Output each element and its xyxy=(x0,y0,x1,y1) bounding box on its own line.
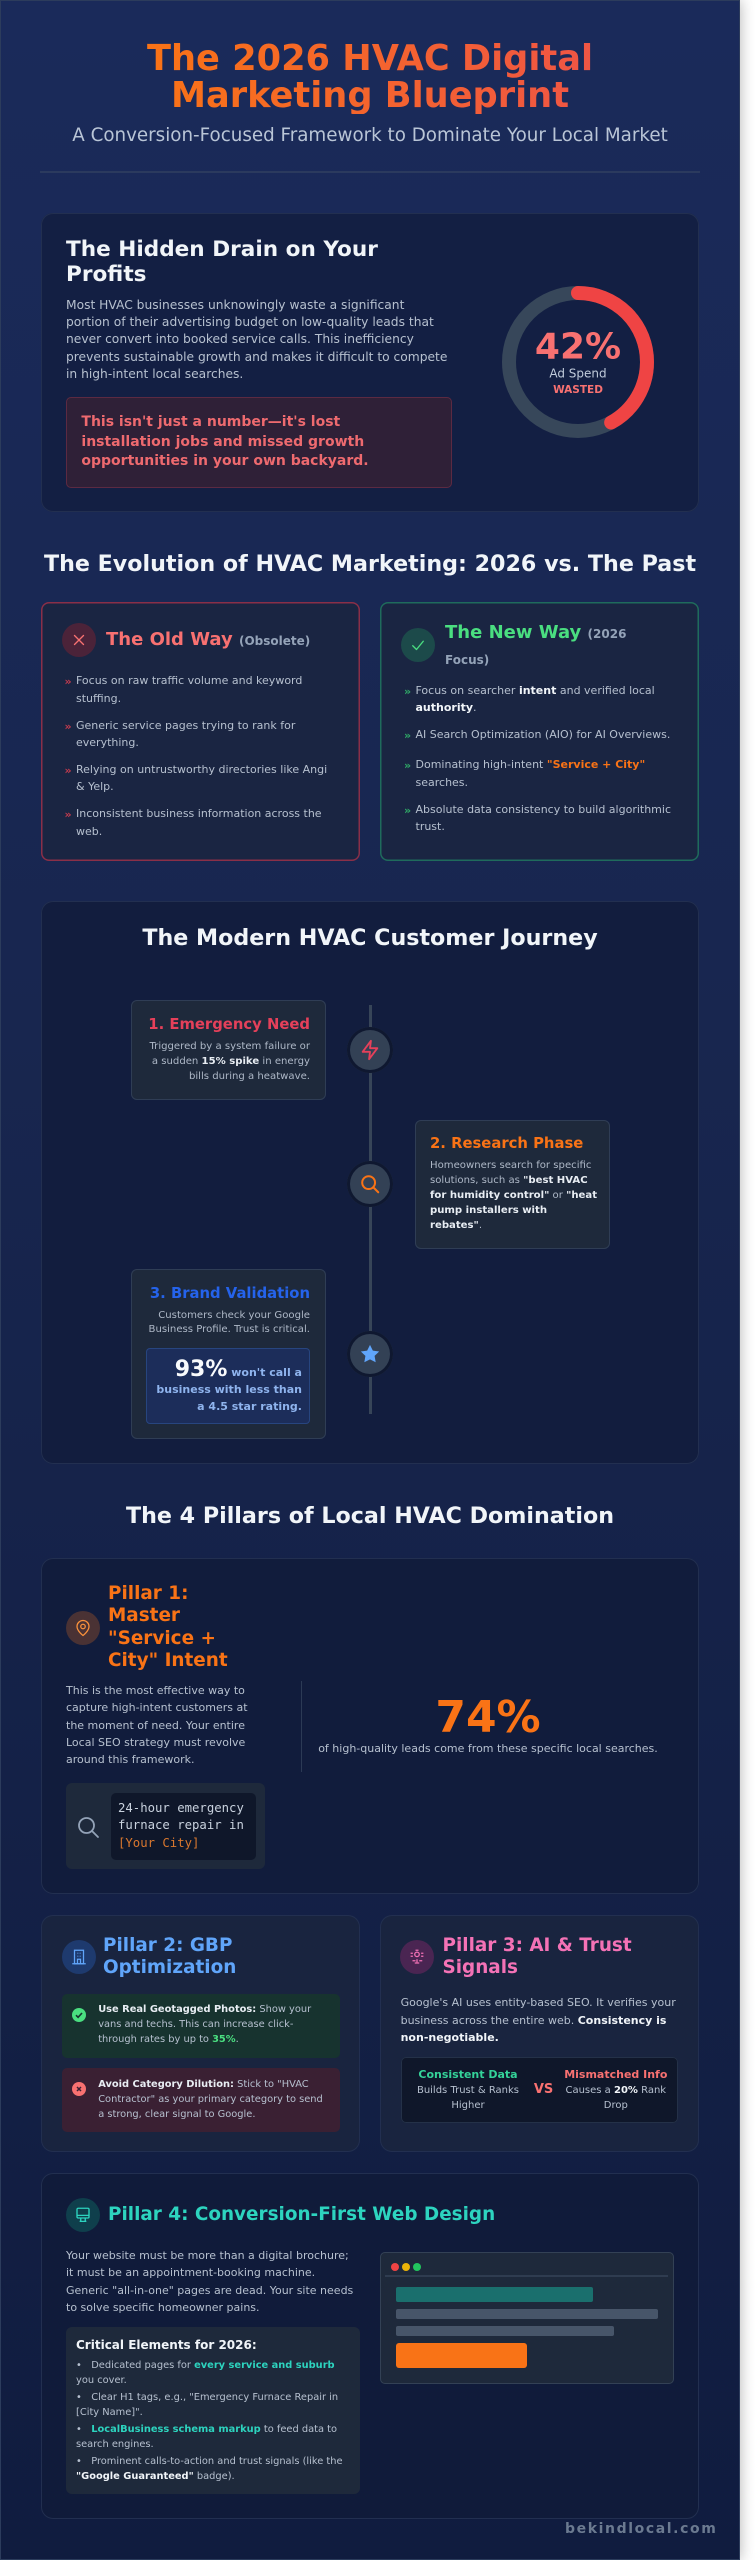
body text: pillar 1: the moment of need. Your entire xyxy=(66,1719,245,1732)
step 1 card xyxy=(131,1000,326,1100)
heading: evolution: The Evolution of HVAC Marketing: 2026 vs. The Past xyxy=(44,551,696,577)
body text: pillar 1: Local SEO strategy must revolve xyxy=(66,1736,245,1749)
panel: old way: » xyxy=(64,764,72,777)
item: AI Search Optimization (AIO) for AI Overviews. xyxy=(416,728,670,741)
body text: pillar 1: This is the most effective way to xyxy=(66,1684,245,1697)
item: you cover. xyxy=(76,2375,127,2386)
heading: pillar 3 xyxy=(442,1935,632,1978)
callout text: opportunities in your own backyard. xyxy=(81,453,369,469)
body text: pillar 1: around this framework. xyxy=(66,1753,194,1766)
step 3 title: 3. Brand Validation xyxy=(150,1285,310,1302)
browser mockup xyxy=(380,2252,674,2384)
tip text: vans and techs. This can increase click- xyxy=(98,2019,293,2030)
mismatched info: Mismatched Info xyxy=(564,2068,667,2081)
heading: pillar 2 xyxy=(103,1935,236,1978)
panel: old way: » xyxy=(64,720,72,733)
step 3 text xyxy=(149,1310,310,1335)
body text: pillar 4: Generic "all-in-one" pages are dead. Your site needs xyxy=(66,2284,353,2297)
window dots xyxy=(391,2263,421,2271)
consistent data xyxy=(417,2068,519,2111)
heading: hidden drain xyxy=(66,237,378,287)
item: "Google Guaranteed" badge). xyxy=(76,2471,235,2482)
body text: hidden drain: in high-intent local searches. xyxy=(66,367,243,381)
item xyxy=(404,684,655,714)
search example box xyxy=(66,1783,265,1869)
footer brand: bekindlocal.com xyxy=(565,2521,717,2537)
mock headline bar xyxy=(396,2287,593,2302)
consistent data: Higher xyxy=(451,2100,485,2111)
step 2 title: 2. Research Phase xyxy=(430,1135,583,1152)
body text: pillar 1 xyxy=(66,1684,248,1766)
item: Focus on raw traffic volume and keyword xyxy=(76,674,302,687)
item: authority. xyxy=(416,701,477,714)
mock CTA button xyxy=(396,2343,527,2368)
step 2 text: for humidity control" or "heat xyxy=(430,1190,597,1201)
step 1 title: 1. Emergency Need xyxy=(148,1016,310,1033)
callout text: installation jobs and missed growth xyxy=(81,434,364,450)
body text: pillar 3: Google's AI uses entity-based SEO. It verifies your xyxy=(401,1996,676,2009)
panel: new way xyxy=(380,602,699,861)
step 2 text: pump installers with xyxy=(430,1205,547,1216)
item xyxy=(64,674,302,705)
tip text: Contractor" as your primary category to send xyxy=(98,2094,323,2105)
donut chart: 42% wasted: Ad Spend xyxy=(549,367,607,381)
stat callout: 93% xyxy=(146,1348,310,1424)
title xyxy=(145,41,595,114)
panel: old way: » xyxy=(64,675,72,688)
body text: pillar 4: it must be an appointment-booking machine. xyxy=(66,2266,315,2279)
icon: map pin xyxy=(66,1611,100,1645)
item: Generic service pages trying to rank for xyxy=(76,719,295,732)
icon: building xyxy=(62,1940,96,1974)
item: [City Name]". xyxy=(76,2407,143,2418)
item xyxy=(76,2392,338,2418)
body text: pillar 3: non-negotiable. xyxy=(401,2031,499,2044)
panel: old way xyxy=(41,602,360,861)
body text: hidden drain: Most HVAC businesses unknowingly waste a significant xyxy=(66,298,404,312)
title: Marketing Blueprint xyxy=(171,75,569,116)
donut chart: 42% wasted xyxy=(502,286,654,438)
tip text: through rates by up to 35%. xyxy=(98,2034,239,2045)
icon: x mark xyxy=(62,623,96,657)
timeline node: bolt xyxy=(347,1027,393,1073)
tip text: Use Real Geotagged Photos: Show your xyxy=(98,2004,311,2015)
icon: red x xyxy=(72,2082,86,2096)
panel: hidden drain xyxy=(41,213,699,512)
panel: new way: » xyxy=(404,804,411,817)
query text: 24-hour emergency xyxy=(118,1801,244,1815)
stat text: a 4.5 star rating. xyxy=(197,1400,302,1413)
body text: hidden drain: prevents sustainable growth and makes it difficult to compete xyxy=(66,350,447,364)
heading: pillars: The 4 Pillars of Local HVAC Domination xyxy=(126,1503,614,1529)
heading: new way: Focus) xyxy=(445,653,489,667)
tip: geotagged photos xyxy=(62,1994,340,2058)
heading: pillar 1: Master xyxy=(108,1605,180,1626)
icon: check mark xyxy=(401,628,435,662)
tip: category dilution xyxy=(62,2068,340,2132)
step 2 card xyxy=(414,1120,610,1249)
panel: pillar 1 xyxy=(41,1558,699,1894)
callout text xyxy=(81,414,369,469)
heading: hidden drain: The Hidden Drain on Your xyxy=(66,237,378,262)
item: web. xyxy=(76,825,102,838)
item xyxy=(76,2424,337,2450)
step 3 text: Customers check your Google xyxy=(158,1310,310,1321)
stat caption: of high-quality leads come from these specific local searches. xyxy=(318,1742,658,1755)
consistent data: Builds Trust & Ranks xyxy=(417,2085,519,2096)
donut chart: 42% wasted: WASTED xyxy=(553,384,603,396)
heading: pillar 3: Pillar 3: AI & Trust xyxy=(442,1935,632,1956)
consistent data: Consistent Data xyxy=(418,2068,518,2081)
tip text xyxy=(98,2079,323,2120)
subtitle: A Conversion-Focused Framework to Dominate Your Local Market xyxy=(72,124,668,146)
icon: magnifier xyxy=(78,1817,99,1838)
item: & Yelp. xyxy=(76,780,114,793)
item: • Clear H1 tags, e.g., "Emergency Furnace Repair in xyxy=(76,2392,338,2403)
step 2 text: rebates". xyxy=(430,1220,482,1231)
heading: pillar 3: Signals xyxy=(442,1957,518,1978)
body text: hidden drain xyxy=(66,298,447,381)
mismatched info: Drop xyxy=(604,2100,628,2111)
panel: new way: » xyxy=(404,685,411,698)
item: Relying on untrustworthy directories like Angi xyxy=(76,763,327,776)
item: • Prominent calls-to-action and trust signals (like the xyxy=(76,2456,343,2467)
item xyxy=(404,758,645,789)
step 1 text: a sudden 15% spike in energy xyxy=(152,1056,310,1067)
item: trust. xyxy=(416,820,445,833)
heading: pillar 1: Pillar 1: xyxy=(108,1583,188,1604)
heading: old way: The Old Way (Obsolete) xyxy=(106,629,310,650)
icon: monitor xyxy=(66,2198,100,2232)
body text: pillar 3: business across the entire web. Consistency is xyxy=(401,2014,666,2027)
item xyxy=(404,803,671,833)
heading: customer journey: The Modern HVAC Customer Journey xyxy=(142,925,598,951)
item xyxy=(76,2360,335,2386)
step 2 text: solutions, such as "best HVAC xyxy=(430,1175,588,1186)
item xyxy=(64,719,296,749)
icon: signal chip xyxy=(400,1940,434,1974)
item: • LocalBusiness schema markup to feed data to xyxy=(76,2424,337,2435)
callout text: This isn't just a number—it's lost xyxy=(81,414,340,430)
step 1 text xyxy=(149,1041,310,1082)
body text: hidden drain: portion of their advertising budget on low-quality leads that xyxy=(66,315,434,329)
item: • Dedicated pages for every service and suburb xyxy=(76,2360,335,2371)
list: old way xyxy=(64,674,327,838)
item xyxy=(76,2456,343,2482)
stat text: 93% won't call a xyxy=(175,1357,302,1382)
callout: lost jobs xyxy=(66,397,452,488)
heading: pillar 1: City" Intent xyxy=(108,1650,228,1671)
critical heading: Critical Elements for 2026: xyxy=(76,2338,257,2352)
vs label: VS xyxy=(534,2082,553,2097)
tip text: a strong, clear signal to Google. xyxy=(98,2109,255,2120)
list: new way xyxy=(404,684,671,833)
mismatched info xyxy=(564,2068,667,2111)
panel: pillar 4 xyxy=(41,2173,699,2519)
step 2 text: Homeowners search for specific xyxy=(430,1160,591,1171)
panel: new way: » xyxy=(404,729,411,742)
stat text xyxy=(156,1357,302,1413)
panel: customer journey xyxy=(41,901,699,1464)
body text: pillar 4: to solve specific homeowner pains. xyxy=(66,2301,260,2314)
query text: furnace repair in xyxy=(118,1818,244,1832)
tip text xyxy=(98,2004,312,2045)
item xyxy=(64,807,322,838)
panel: pillar 3 xyxy=(380,1915,699,2152)
mismatched info: Causes a 20% Rank xyxy=(565,2085,666,2096)
heading: new way xyxy=(445,622,626,667)
panel: pillar 2 xyxy=(41,1915,360,2152)
item: searches. xyxy=(416,776,468,789)
item: search engines. xyxy=(76,2439,154,2450)
body text: pillar 4 xyxy=(66,2249,353,2314)
heading: pillar 1: "Service + xyxy=(108,1628,216,1649)
item: Inconsistent business information across the xyxy=(76,807,322,820)
heading: new way: The New Way (2026 xyxy=(445,622,626,643)
item: Dominating high-intent "Service + City" xyxy=(416,758,645,771)
heading: pillar 2: Pillar 2: GBP xyxy=(103,1935,232,1956)
item xyxy=(64,763,327,793)
heading: pillar 1 xyxy=(108,1583,228,1671)
mock text bar xyxy=(396,2309,658,2319)
query text xyxy=(118,1801,244,1850)
stat text: business with less than xyxy=(156,1383,302,1396)
timeline node: search xyxy=(347,1161,393,1207)
step 2 text xyxy=(430,1160,597,1231)
timeline node: star xyxy=(347,1331,393,1377)
body text: pillar 4: Your website must be more than a digital brochure; xyxy=(66,2249,349,2262)
item: everything. xyxy=(76,736,139,749)
step 1 text: Triggered by a system failure or xyxy=(149,1041,310,1052)
query text: [Your City] xyxy=(118,1836,199,1850)
panel: new way: » xyxy=(404,759,411,772)
item: stuffing. xyxy=(76,692,121,705)
search query xyxy=(111,1793,256,1860)
item: Focus on searcher intent and verified local xyxy=(416,684,655,697)
step 3 card xyxy=(131,1269,326,1439)
stat: 74%: 74% xyxy=(435,1692,541,1743)
heading: pillar 2: Optimization xyxy=(103,1957,236,1978)
body text: pillar 3 xyxy=(401,1996,676,2044)
heading: pillar 4: Pillar 4: Conversion-First Web Design xyxy=(108,2204,495,2225)
mock text bar xyxy=(396,2326,614,2336)
step 3 text: Business Profile. Trust is critical. xyxy=(149,1324,310,1335)
critical list xyxy=(76,2360,343,2482)
panel: old way: » xyxy=(64,808,72,821)
tip text: Avoid Category Dilution: Stick to "HVAC xyxy=(98,2079,309,2090)
critical elements box xyxy=(66,2327,360,2494)
title: The 2026 HVAC Digital xyxy=(147,38,593,79)
icon: green check xyxy=(72,2008,86,2022)
body text: pillar 1: capture high-intent customers at xyxy=(66,1701,248,1714)
item: Absolute data consistency to build algorithmic xyxy=(416,803,671,816)
step 1 text: bills during a heatwave. xyxy=(189,1071,310,1082)
comparison box xyxy=(401,2057,678,2123)
heading: hidden drain: Profits xyxy=(66,262,146,287)
donut chart: 42% wasted: 42% xyxy=(535,327,621,368)
body text: hidden drain: never convert into booked service calls. This inefficiency xyxy=(66,332,414,346)
